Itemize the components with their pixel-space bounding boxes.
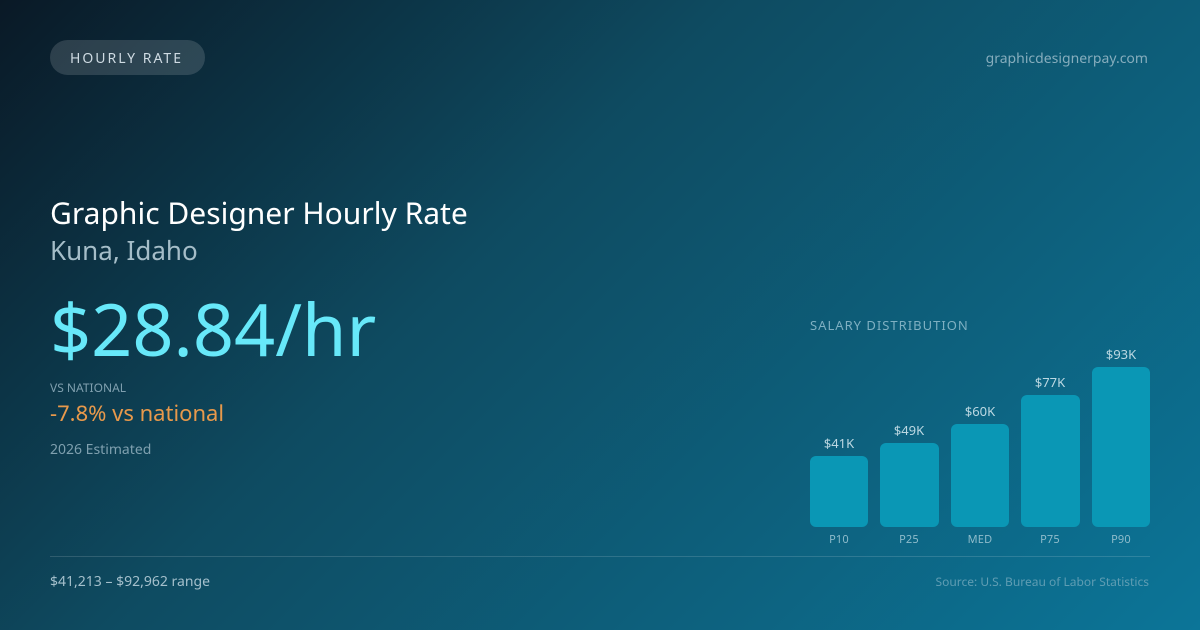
chart heading: SALARY DISTRIBUTION	[810, 316, 969, 334]
value: P75: $77K	[1035, 373, 1065, 391]
badge label: HOURLY RATE	[70, 49, 183, 68]
bar: P75	[1021, 395, 1080, 527]
footer divider	[50, 556, 1150, 557]
axis label: P25: P25	[899, 532, 919, 547]
title: Graphic Designer Hourly Rate	[50, 192, 468, 233]
axis label: P90: P90	[1111, 532, 1131, 547]
bar: MED	[951, 424, 1009, 527]
axis label: P10: P10	[829, 532, 849, 547]
salary range: $41,213 – $92,962 range	[50, 572, 210, 591]
value: P10: $41K	[824, 434, 854, 452]
estimate note: 2026 Estimated	[50, 440, 151, 459]
source note: Source: U.S. Bureau of Labor Statistics	[936, 573, 1149, 590]
comparison label: VS NATIONAL	[50, 379, 126, 396]
hourly rate value: $28.84/hr	[50, 280, 376, 378]
value: P90: $93K	[1106, 345, 1136, 363]
comparison value: -7.8% vs national	[50, 398, 224, 428]
location subtitle: Kuna, Idaho	[50, 232, 198, 268]
bar: P25	[880, 443, 939, 527]
bar: P90	[1092, 367, 1150, 527]
axis label: P75: P75	[1040, 532, 1060, 547]
value: MED: $60K	[965, 402, 995, 420]
bar chart: salary distribution	[810, 316, 1150, 547]
bar: P10	[810, 456, 868, 527]
site name: graphicdesignerpay.com	[986, 49, 1148, 68]
axis label: MED: MED	[968, 532, 992, 547]
badge: hourly rate	[50, 40, 205, 75]
value: P25: $49K	[894, 421, 924, 439]
